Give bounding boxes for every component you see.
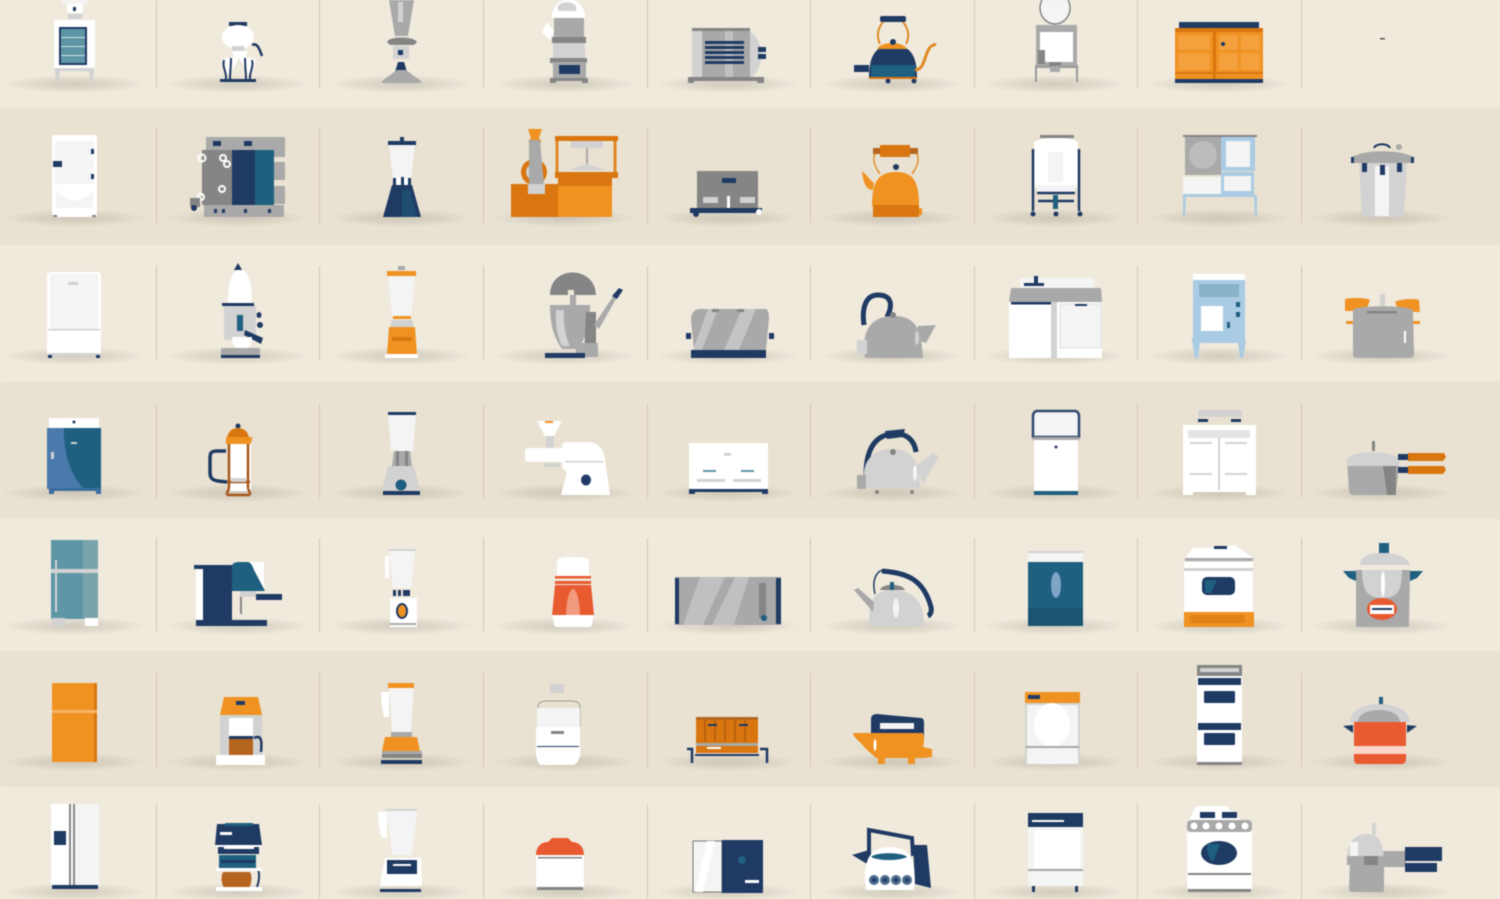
icon: light blue electric range bbox=[1192, 274, 1246, 358]
icon: white double oven stove with top shelf bbox=[1183, 410, 1256, 495]
icon: orange fridge freezer bbox=[52, 683, 97, 762]
icon: espresso machine exploded view bbox=[190, 137, 285, 217]
icon: orange kettle with wooden handle bbox=[862, 145, 922, 217]
icon: red and white spice grinder bbox=[552, 557, 594, 627]
icon: silver base blender bbox=[382, 412, 420, 495]
icon: grey pressure cooker navy handles bbox=[1347, 823, 1442, 892]
icon: silver toaster bbox=[686, 309, 774, 358]
icon: French press bbox=[210, 424, 252, 495]
icon: tower espresso machine bbox=[221, 263, 263, 358]
icon: white side-by-side refrigerator bbox=[51, 804, 99, 889]
icon: grey pressure cooker orange double handles bbox=[1347, 441, 1446, 495]
icon: grey pressure pot orange handles bbox=[1345, 294, 1420, 358]
icon: grey stand mixer bbox=[545, 272, 623, 358]
icon: rounded white refrigerator bbox=[47, 272, 101, 358]
icon: wood panel toaster bbox=[687, 717, 767, 763]
icon: white kitchenette sink unit bbox=[1009, 276, 1102, 358]
icon: white dishwasher orange panel bbox=[1025, 692, 1080, 765]
icon: orange and white coffee maker bbox=[216, 697, 265, 765]
icon: silver kettle navy side handle bbox=[854, 570, 931, 626]
icon: orange and grey base blender bbox=[381, 683, 422, 764]
icon: grey teapot kettle navy loop bbox=[857, 295, 936, 358]
icon: orange modern kettle bbox=[853, 714, 932, 764]
icon: grey box toaster oven bbox=[690, 171, 762, 217]
icon: orange range cooker bbox=[1175, 22, 1263, 83]
icon: white food processor bbox=[536, 684, 580, 765]
icon: white icebox refrigerator bbox=[52, 135, 97, 217]
icon: tall double wall oven bbox=[1197, 665, 1242, 765]
icon: navy handle white patterned kettle bbox=[852, 830, 931, 890]
icon: pale blue and grey enamel range bbox=[1183, 135, 1257, 216]
icon: white stove orange plinth bbox=[1184, 545, 1254, 627]
icon: vacuum coffee maker bbox=[220, 22, 262, 82]
icon: washstand with oval mirror bbox=[1036, 0, 1077, 82]
icon: grey urn with white dome bbox=[542, 0, 588, 83]
icon: white meat grinder bbox=[525, 421, 610, 495]
icon: folded navy microwave bbox=[693, 840, 763, 893]
icon: navy and copper kettle bbox=[854, 16, 936, 84]
icon: vintage refrigerator with compressor bbox=[54, 0, 95, 82]
icon: white tank on navy stand bbox=[1030, 135, 1082, 216]
icon: red capped juicer bbox=[536, 838, 584, 890]
icon: orange bread machine with grinder bbox=[511, 129, 618, 217]
icon: white stove oval window bbox=[1186, 806, 1252, 892]
icon: white flat toaster bbox=[689, 443, 768, 494]
icon: white blender navy display bbox=[378, 809, 422, 892]
icon: silver kettle navy swoop handle bbox=[857, 429, 939, 494]
icon: red patterned pressure pot bbox=[1343, 697, 1417, 764]
icon: tall grey drink dispenser bbox=[382, 0, 421, 83]
icon: tiny dash bbox=[1380, 38, 1385, 40]
icon: white top-loading washer bbox=[1033, 411, 1079, 495]
icon: grey pressure canner bbox=[1351, 144, 1414, 217]
icon: white blender orange dial bbox=[385, 549, 417, 627]
icon: navy base blender bbox=[383, 137, 421, 217]
icon: pressure cooker with red badge bbox=[1343, 543, 1423, 627]
icon: navy and blue drip coffee maker bbox=[194, 562, 282, 626]
icon: white dishwasher navy panel bbox=[1028, 813, 1083, 892]
icon: wide silver toaster bbox=[675, 577, 781, 625]
icon: blue and teal refrigerator bbox=[47, 418, 101, 494]
icon: chrome toaster with slats bbox=[688, 28, 766, 83]
icon: navy and teal coffee machine bbox=[215, 823, 262, 891]
icon: orange base blender bbox=[385, 266, 418, 358]
icon: teal dishwasher bbox=[1028, 551, 1083, 626]
icon: teal fridge freezer bbox=[51, 540, 98, 626]
